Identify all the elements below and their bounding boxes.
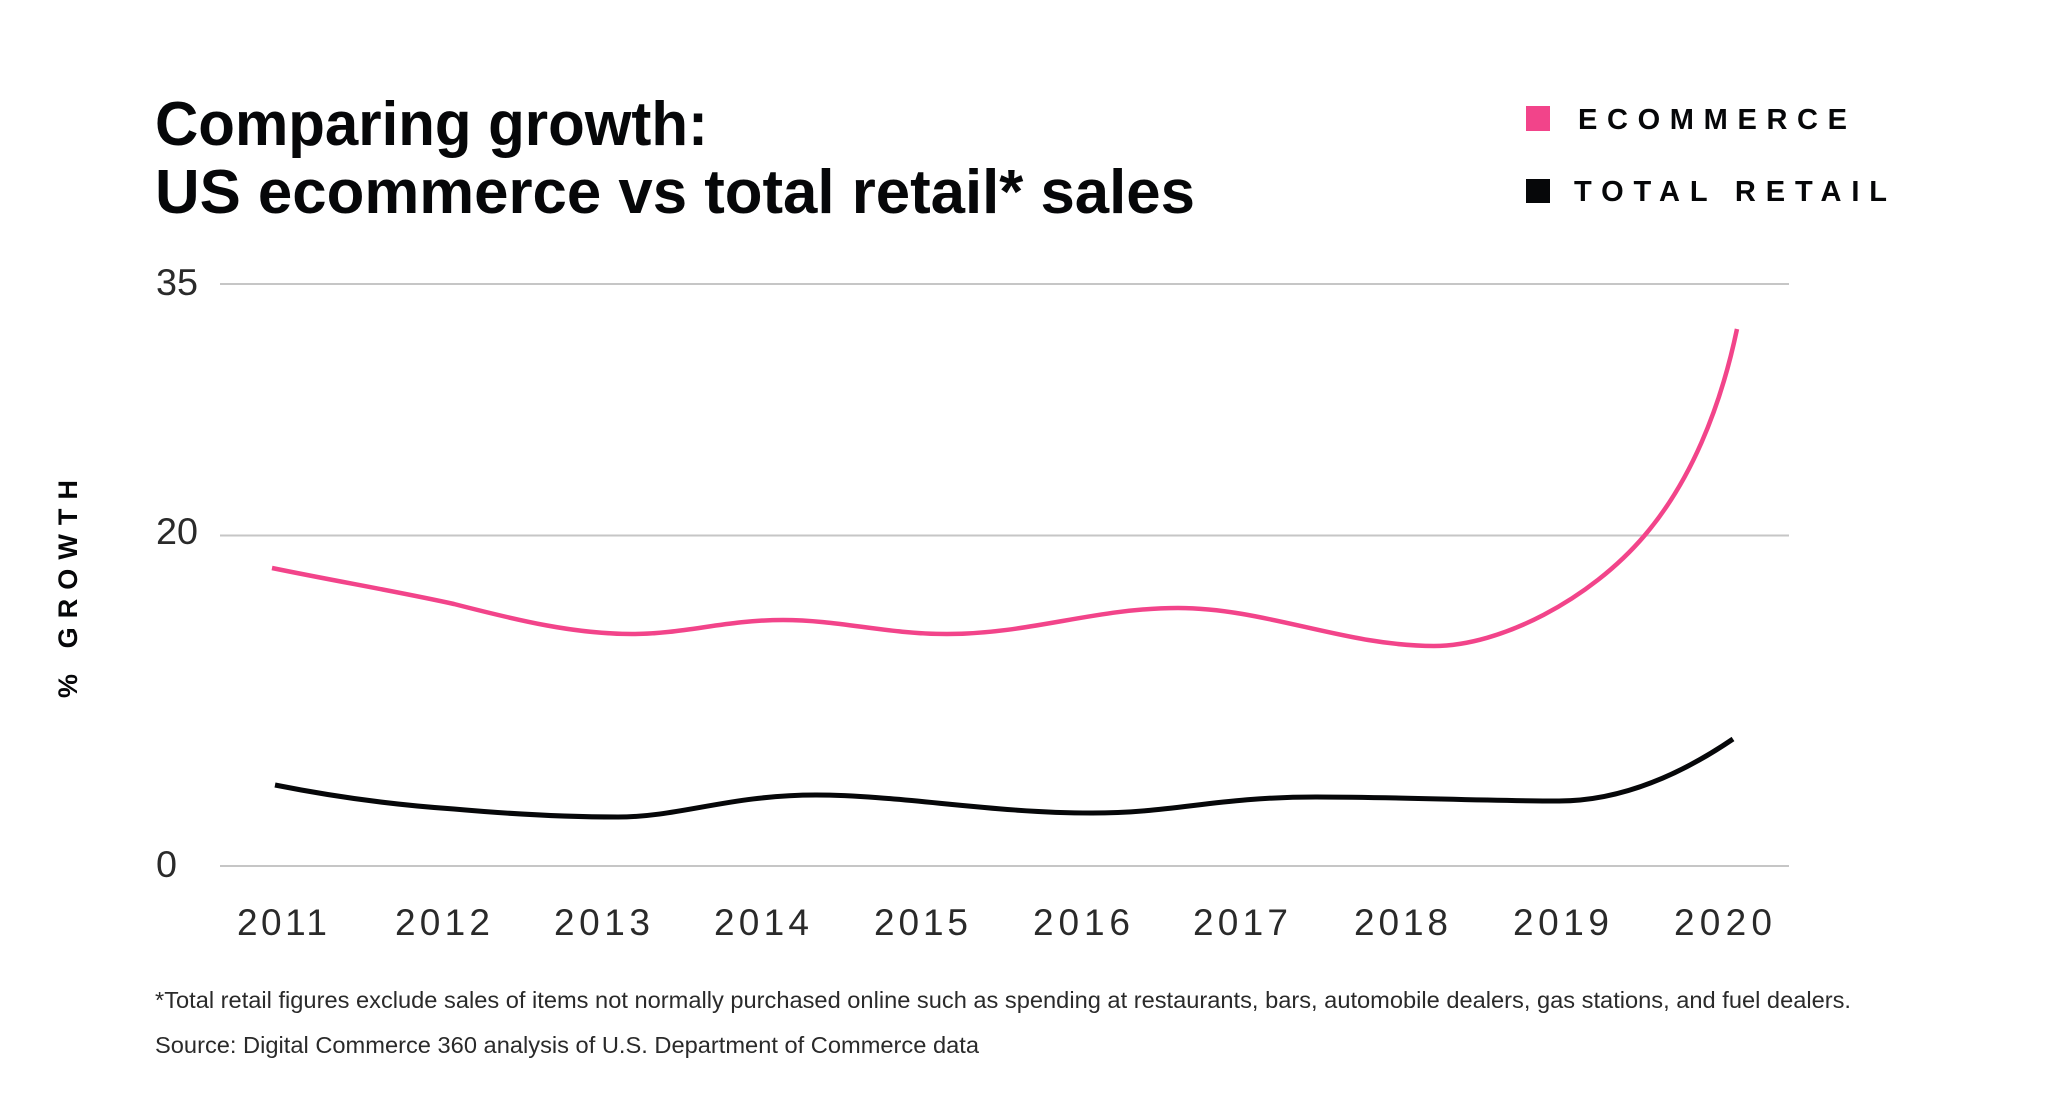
x axis labels: 2014: [714, 902, 809, 943]
legend item: ecommerce: ECOMMERCE: [1578, 104, 1847, 136]
x axis labels: 2020: [1674, 902, 1772, 943]
footnote: Source: Digital Commerce 360 analysis of U.S. Department of Commerce data: [155, 1032, 979, 1058]
x axis labels: 2019: [1513, 902, 1609, 943]
line: ecommerce growth: [272, 329, 1737, 646]
footnote: *Total retail figures exclude sales of items not normally purchased online such as spending at restaurants, bars, automobile dealers, gas stations, and fuel dealers.: [155, 987, 1851, 1013]
title: [155, 90, 1195, 227]
x axis labels: 2015: [874, 902, 968, 943]
x axis labels: 2011: [237, 902, 327, 943]
legend item: total retail: TOTAL RETAIL: [1574, 176, 1887, 208]
y axis labels: 0: [156, 844, 177, 885]
footnote: [155, 987, 1851, 1058]
x axis labels: [237, 902, 1772, 943]
y axis labels: 20: [156, 511, 198, 552]
line: total retail growth: [275, 739, 1733, 817]
y axis labels: [156, 262, 198, 885]
y axis title: % GROWTH: [53, 480, 83, 698]
title: Comparing growth:: [155, 90, 708, 159]
legend: [1526, 104, 1887, 208]
y axis labels: 35: [156, 262, 198, 303]
x axis labels: 2012: [395, 902, 490, 943]
x axis labels: 2013: [554, 902, 650, 943]
title: US ecommerce vs total retail* sales: [155, 158, 1195, 227]
x axis labels: 2017: [1193, 902, 1288, 943]
x axis labels: 2016: [1033, 902, 1130, 943]
x axis labels: 2018: [1354, 902, 1448, 943]
